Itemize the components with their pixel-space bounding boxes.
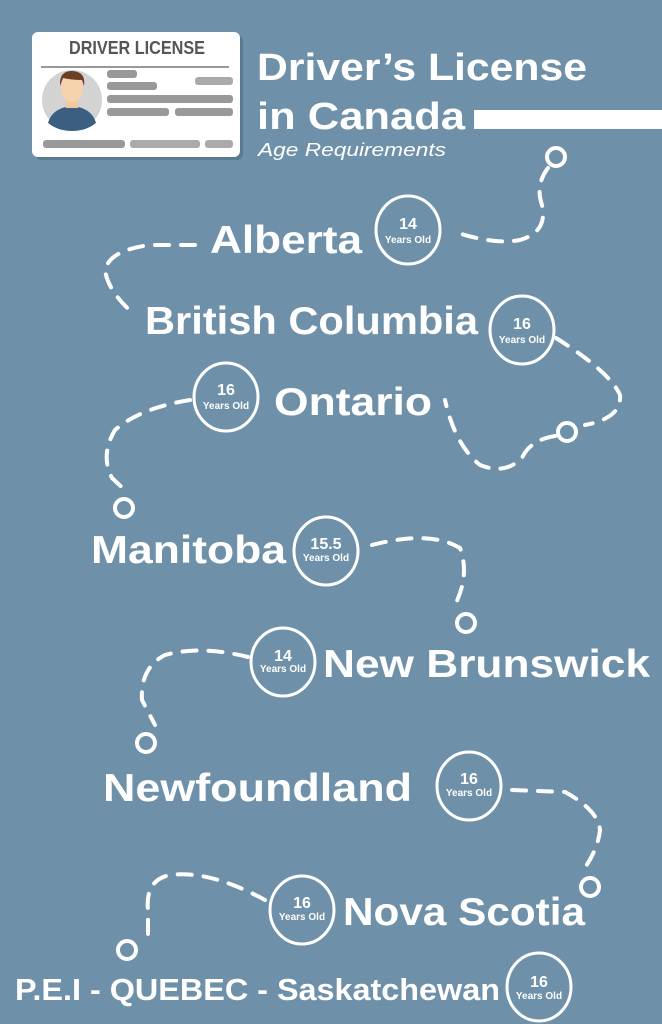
province: Alberta: Years Old bbox=[385, 235, 431, 246]
province: British Columbia: British Columbia bbox=[145, 300, 478, 343]
title: Driver’s License bbox=[257, 47, 587, 89]
province: Manitoba bbox=[91, 517, 358, 585]
province: Manitoba: Manitoba bbox=[91, 529, 286, 572]
province: Manitoba: Years Old bbox=[303, 553, 349, 564]
province: Nova Scotia: Nova Scotia bbox=[343, 891, 585, 934]
dashed route bbox=[105, 168, 620, 935]
province: New Brunswick bbox=[251, 628, 650, 696]
province: Ontario: Ontario bbox=[274, 381, 432, 424]
title: Age Requirements bbox=[257, 140, 446, 160]
province: New Brunswick: Years Old bbox=[260, 664, 306, 675]
province: New Brunswick: 14 bbox=[274, 648, 292, 665]
province: P.E.I - QUEBEC - Saskatchewan: Years Old bbox=[516, 991, 562, 1002]
province: P.E.I - QUEBEC - Saskatchewan: P.E.I - QUEBEC - Saskatchewan bbox=[15, 972, 500, 1007]
province: P.E.I - QUEBEC - Saskatchewan: 16 bbox=[530, 974, 548, 991]
province: Newfoundland: 16 bbox=[460, 771, 478, 788]
province: British Columbia: Years Old bbox=[499, 335, 545, 346]
province: Ontario bbox=[194, 363, 432, 431]
province: Alberta: 14 bbox=[399, 216, 417, 233]
province: P.E.I - QUEBEC - Saskatchewan bbox=[15, 953, 571, 1021]
province: Alberta bbox=[210, 196, 440, 264]
province: Nova Scotia: Years Old bbox=[279, 912, 325, 923]
icon: driver license card bbox=[32, 32, 243, 160]
title bbox=[257, 47, 662, 160]
province: Ontario: 16 bbox=[217, 382, 235, 399]
province: Newfoundland: Newfoundland bbox=[103, 767, 412, 810]
province: Newfoundland bbox=[103, 752, 501, 820]
province: Nova Scotia bbox=[270, 876, 585, 944]
title: in Canada bbox=[257, 96, 466, 138]
province: Newfoundland: Years Old bbox=[446, 788, 492, 799]
province: British Columbia bbox=[145, 296, 554, 364]
route node markers bbox=[115, 148, 599, 959]
province: Nova Scotia: 16 bbox=[293, 895, 311, 912]
province: New Brunswick: New Brunswick bbox=[323, 643, 650, 686]
province: Ontario: Years Old bbox=[203, 401, 249, 412]
icon: driver license card: DRIVER LICENSE bbox=[69, 38, 205, 58]
province: British Columbia: 16 bbox=[513, 316, 531, 333]
province: Manitoba: 15.5 bbox=[310, 536, 342, 553]
province: Alberta: Alberta bbox=[210, 219, 362, 262]
